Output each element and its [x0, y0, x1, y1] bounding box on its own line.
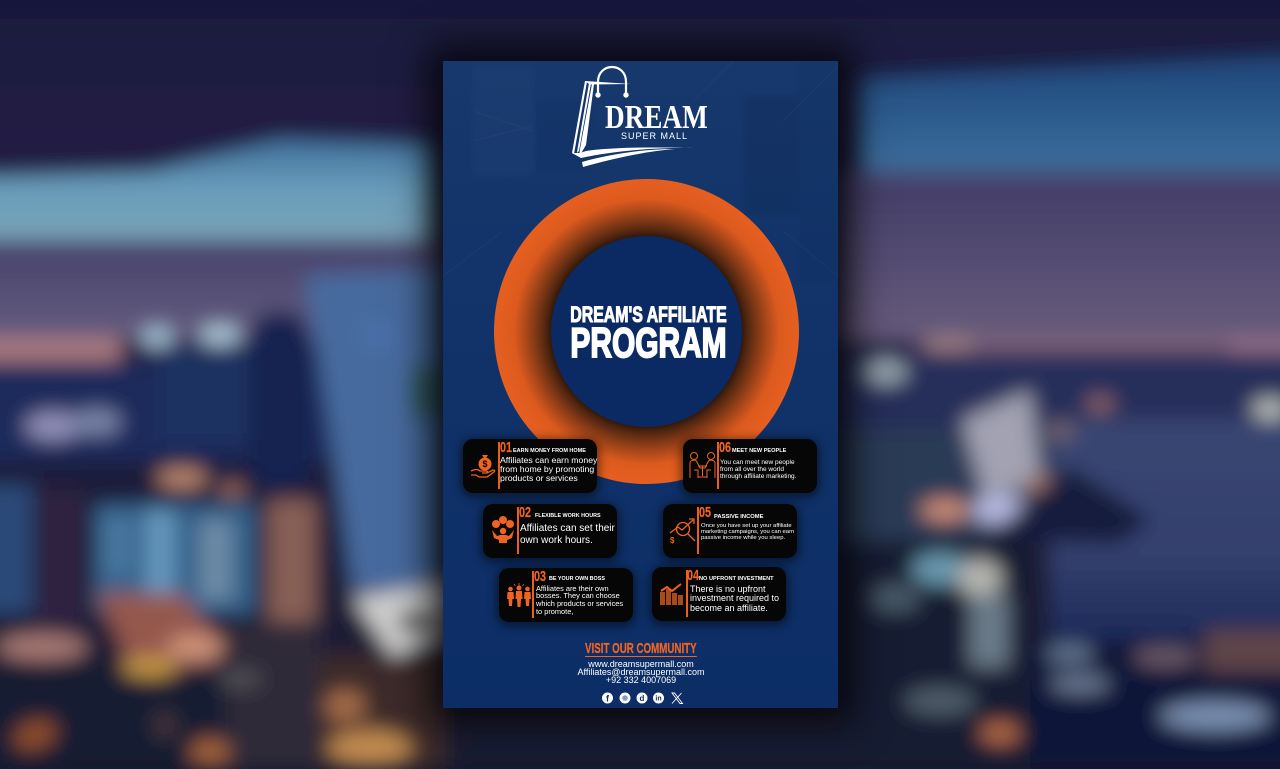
icon: meeting people — [690, 452, 716, 478]
logo wordmark: DREAM — [605, 99, 708, 136]
card 02: own work hours. — [520, 535, 593, 546]
title: DREAM'S AFFILIATE — [570, 302, 727, 327]
card 03: to promote, — [536, 607, 573, 616]
card 01: from home by promoting — [500, 464, 594, 474]
card 03: 03 — [534, 568, 546, 585]
social icons: in — [655, 696, 662, 702]
contact details: Affiliates@dreamsupermall.com — [577, 667, 704, 677]
card 04: There is no upfront — [690, 584, 766, 594]
orange ring — [494, 179, 799, 484]
card 04: become an affiliate. — [690, 603, 768, 613]
social icons — [602, 692, 684, 704]
card 02: 02 — [519, 504, 531, 521]
footer heading: VISIT OUR COMMUNITY — [585, 640, 696, 657]
card 05 — [663, 504, 797, 558]
card 03: Affiliates are their own — [536, 584, 609, 592]
card 04 — [652, 567, 786, 621]
icon: shopping bag — [572, 66, 692, 167]
card 01 — [463, 439, 597, 493]
card 01: Affiliates can earn money — [500, 455, 597, 465]
card 05: marketing campaigns, you can earn — [701, 529, 794, 535]
icon: flexible hours — [492, 516, 514, 543]
contact details — [577, 659, 704, 685]
poster — [443, 61, 838, 708]
card 05: PASSIVE INCOME — [714, 514, 764, 520]
card 05: Once you have set up your affiliate — [701, 522, 792, 528]
card 05: 05 — [699, 504, 711, 521]
card 06 — [683, 439, 817, 493]
card 03: BE YOUR OWN BOSS — [549, 576, 605, 582]
card 02: Affiliates can set their — [520, 523, 615, 534]
card 03: which products or services — [536, 599, 623, 608]
social icons: f — [606, 694, 610, 704]
card 02: FLEXIBLE WORK HOURS — [535, 513, 601, 519]
card 04: NO UPFRONT INVESTMENT — [699, 576, 774, 582]
card 04: 04 — [687, 567, 699, 584]
card 03 — [499, 568, 633, 622]
card 01: EARN MONEY FROM HOME — [513, 448, 586, 454]
card 02 — [483, 504, 617, 558]
icon: three people — [507, 583, 531, 607]
logo — [572, 66, 708, 167]
contact details: +92 332 4007069 — [606, 675, 676, 685]
inner circle — [551, 236, 742, 427]
card 05: passive income while you sleep. — [701, 535, 785, 541]
contact details: www.dreamsupermall.com — [588, 659, 694, 669]
card 04: investment required to — [690, 593, 779, 603]
icon: magnifier with growth — [670, 518, 696, 544]
card 06: MEET NEW PEOPLE — [732, 448, 786, 454]
card 06: 06 — [719, 439, 731, 456]
poster shadow — [443, 61, 838, 708]
icon: money bag in hand: $ — [482, 459, 488, 469]
title: PROGRAM — [570, 319, 727, 366]
social icons: d — [640, 694, 645, 703]
icon: money bag in hand — [470, 455, 496, 478]
card 06: through affiliate marketing. — [720, 473, 796, 480]
card 01: products or services — [500, 473, 578, 483]
icon: rising bars — [660, 583, 683, 605]
card 06: You can meet new people — [720, 459, 795, 466]
card 01: 01 — [500, 439, 512, 456]
card 06: from all over the world — [720, 466, 784, 473]
card 03: bosses. They can choose — [536, 591, 620, 600]
logo tagline: SUPER MALL — [621, 131, 688, 141]
faint building backdrop — [473, 111, 533, 142]
